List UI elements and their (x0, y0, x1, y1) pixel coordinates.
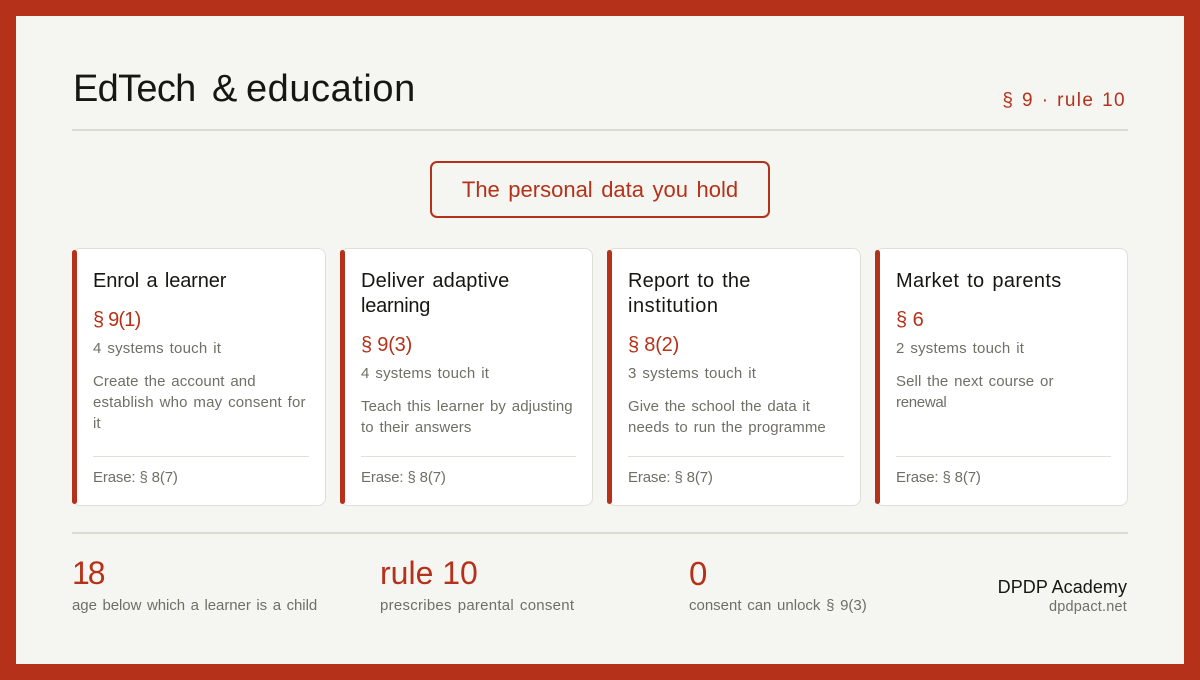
text: 3 systems touch it (628, 365, 756, 382)
text: institution (628, 295, 719, 317)
text: Deliver adaptive (361, 270, 509, 292)
text: § 8(2) (628, 334, 679, 356)
text: Erase: § 8(7) (628, 469, 713, 486)
text: Enrol a learner (93, 270, 226, 292)
brand footer: dpdpact.net (1049, 599, 1127, 615)
text: 4 systems touch it (93, 340, 221, 357)
title: & (212, 68, 236, 110)
text: 2 systems touch it (896, 340, 1024, 357)
text: Sell the next course or (896, 373, 1054, 390)
text: Create the account and (93, 373, 256, 390)
brand footer: DPDP Academy (998, 577, 1127, 597)
title: education (246, 68, 416, 110)
stat: zero: 0 (689, 555, 707, 592)
text: learning (361, 295, 430, 317)
text: Market to parents (896, 270, 1062, 292)
stat: rule 10 (380, 555, 574, 614)
panel: deliver adaptive learning (340, 248, 593, 506)
text: Erase: § 8(7) (93, 469, 178, 486)
title: EdTech (73, 68, 196, 110)
text: renewal (896, 394, 946, 411)
text: 4 systems touch it (361, 365, 489, 382)
reference tag: § 9 · rule 10 (1002, 90, 1126, 111)
text: Teach this learner by adjusting (361, 398, 573, 415)
brand footer (998, 577, 1127, 615)
text: § 9(3) (361, 334, 412, 356)
text: Give the school the data it (628, 398, 810, 415)
banner: personal data (430, 161, 770, 218)
panel: report to the institution (607, 248, 861, 506)
panel: enrol a learner (72, 248, 326, 506)
text: needs to run the programme (628, 419, 826, 436)
text: § 6 (896, 309, 924, 331)
banner: personal data: The personal data you hold (462, 177, 738, 202)
stat: rule 10: prescribes parental consent (380, 597, 574, 614)
text: establish who may consent for (93, 394, 306, 411)
stat: rule 10: rule 10 (380, 555, 478, 591)
panel: market to parents (875, 248, 1128, 506)
stat: zero: consent can unlock § 9(3) (689, 597, 867, 614)
stat: zero (689, 555, 867, 614)
text: Report to the (628, 270, 751, 292)
title (73, 68, 416, 110)
stat: age 18: 18 (72, 555, 104, 591)
text: Erase: § 8(7) (361, 469, 446, 486)
text: § 9(1) (93, 309, 140, 331)
stat: age 18 (72, 555, 317, 614)
text: to their answers (361, 419, 471, 436)
text: it (93, 415, 101, 432)
text: Erase: § 8(7) (896, 469, 981, 486)
stat: age 18: age below which a learner is a child (72, 597, 317, 614)
